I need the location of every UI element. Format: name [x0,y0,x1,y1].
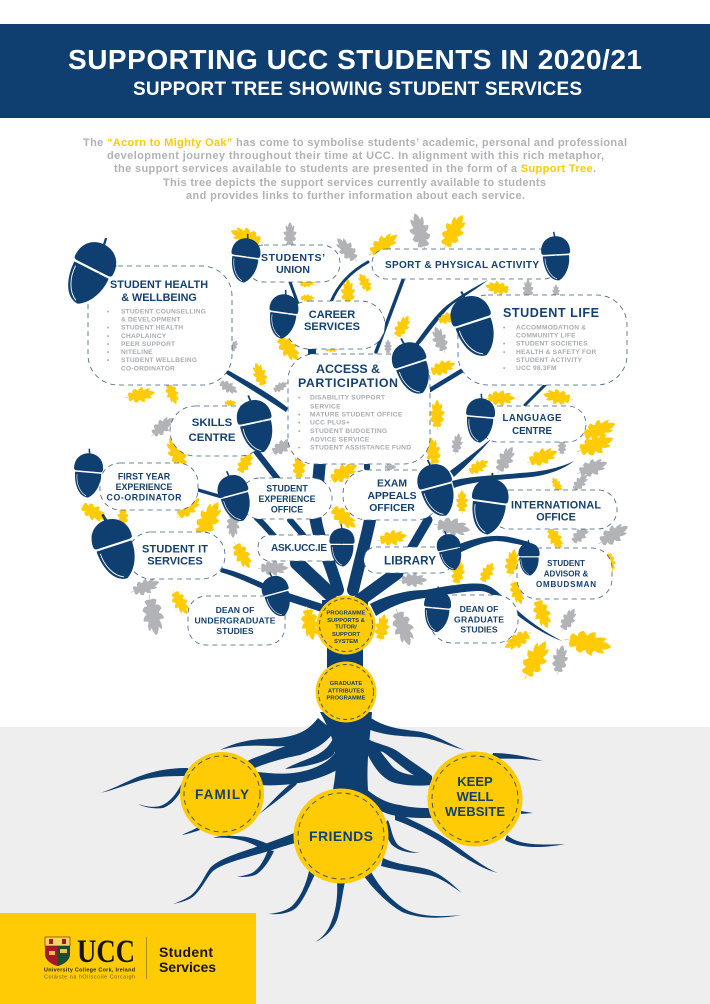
service list: STUDENT BUDGETING [310,428,387,435]
intro text block: This tree depicts the support services currently available to students [163,177,546,189]
circle: graduate attributes programme [316,662,376,722]
intro text block: the support services available to students are presented in the form of a Support Tree. [114,163,596,175]
node: dean of graduate studies: GRADUATE [454,614,504,624]
intro text block: The “Acorn to Mighty Oak” has come to symbolise students’ academic, personal and professional [83,137,627,149]
node: library [364,528,466,573]
icon: acorn [72,448,105,499]
node: student it services: SERVICES [147,556,203,568]
circle: graduate attributes programme: PROGRAMME [327,695,366,701]
node: student advisor and ombudsman: OMBUDSMAN [536,580,596,589]
service list: ACCOMMODATION & [516,324,586,332]
service list: STUDENT ASSISTANCE FUND [310,444,411,452]
circle: family: FAMILY [195,787,249,802]
node: library: LIBRARY [384,554,436,568]
node: exam appeals officer [343,455,461,521]
service list: • [503,324,506,332]
service list: • [503,341,506,348]
footer logo panel: Student [159,944,213,960]
icon: acorn [434,528,466,573]
node: international office [467,471,617,537]
service list: & DEVELOPMENT [121,316,181,324]
tree roots [100,712,565,942]
circle: friends [294,788,388,884]
circle: keep well website [428,752,522,846]
heading: & WELLBEING [121,292,197,304]
circle: keep well website: WELL [457,789,493,804]
node: career services [266,288,385,349]
service list: MATURE STUDENT OFFICE [310,412,403,418]
service list: • [107,349,110,356]
node: ask.ucc.ie [258,524,355,566]
circle: programme supports: PROGRAMME [327,611,366,617]
service list: SERVICE [310,404,341,410]
node: language centre: CENTRE [512,426,552,437]
heading [110,279,208,304]
service list: STUDENT ACTIVITY [516,357,583,364]
node: student advisor and ombudsman: ADVISOR & [544,570,588,578]
heading: STUDENT HEALTH [110,279,208,291]
circle: keep well website: WEBSITE [445,804,505,819]
node: sport and physical activity [372,231,572,281]
service list: PEER SUPPORT [121,341,175,348]
icon: acorn [213,467,256,525]
service list: STUDENT HEALTH [121,325,183,332]
service list [503,324,597,372]
node: first year experience co-ordinator: FIRST YEAR [118,472,171,482]
service list: • [503,349,506,356]
node: exam appeals officer: OFFICER [369,503,415,514]
node: dean of graduate studies: DEAN OF [460,604,498,614]
service list: • [298,444,301,452]
node: students' union: STUDENTS’ [261,252,325,264]
heading: ACCESS & [316,362,380,376]
circle: programme supports: SUPPORT [332,632,360,638]
node: career services: SERVICES [304,321,360,333]
service list: STUDENT SOCIETIES [516,341,588,348]
node: skills centre: CENTRE [188,432,236,444]
icon: ucc crest [45,937,70,966]
node: student experience office: STUDENT [266,484,308,494]
node: first year experience co-ordinator: EXPERIENCE [116,482,172,492]
icon: acorn [84,508,144,585]
icon: acorn [258,569,295,620]
service list: STUDENT WELLBEING [121,357,197,364]
node: student it services [84,508,225,585]
tree trunk and branches [103,262,574,670]
footer logo panel: Coláiste na hOllscoile Corcaigh [44,974,135,980]
node: dean of undergraduate studies [188,569,295,645]
service list: NITELINE [121,349,153,356]
circle: programme supports: SUPPORTS & [327,618,365,624]
node: skills centre [170,392,279,456]
node: student experience office: EXPERIENCE [258,494,316,504]
node: first year experience co-ordinator [72,448,198,510]
node: dean of undergraduate studies: UNDERGRADUATE [194,616,276,626]
icon: acorn [232,392,279,456]
node: student it services: STUDENT IT [142,544,208,556]
node: student life [443,285,627,385]
icon: acorn [228,232,263,284]
service list: • [107,308,110,316]
footer logo panel: UCC [77,934,135,970]
footer logo panel [0,913,256,1004]
node: first year experience co-ordinator: CO-ORDINATOR [106,492,182,502]
service list: • [107,333,110,340]
icon: acorn [329,524,355,566]
node: skills centre: SKILLS [192,417,233,429]
node: access and participation [288,333,437,464]
icon: acorn [412,455,461,521]
footer logo panel: Services [159,959,216,975]
service list: STUDENT COUNSELLING [121,308,206,316]
node: dean of graduate studies [422,585,518,643]
icon: acorn [464,393,497,444]
service list: • [298,394,301,402]
heading: PARTICIPATION [298,376,398,390]
service list [298,394,411,452]
node: dean of graduate studies: STUDIES [460,624,498,634]
header band [0,24,710,118]
service list: • [107,325,110,332]
footer logo panel: University College Cork, Ireland [44,968,135,974]
service list: UCC PLUS+ [310,420,350,427]
node: exam appeals officer: APPEALS [368,491,417,502]
service list: HEALTH & SAFETY FOR [516,349,597,356]
heading: STUDENT LIFE [503,306,599,320]
service list: COMMUNITY LIFE [516,332,576,340]
circle: programme supports: TUTOR/ [335,625,357,631]
service list: • [298,412,301,418]
intro text block [83,137,627,202]
circle: family [180,752,264,836]
icon: acorn [266,288,301,340]
icon: acorn [422,585,453,633]
intro text block: and provides links to further information about each service. [186,190,525,202]
node: language centre [464,393,586,444]
node: ask.ucc.ie: ASK.UCC.IE [271,543,327,554]
circle: friends: FRIENDS [309,828,373,844]
service list: UCC 98.3FM [516,365,557,372]
node: sport and physical activity: SPORT & PHYSICAL ACTIVITY [385,260,539,271]
node: student advisor and ombudsman [517,540,612,599]
circle: keep well website: KEEP [457,774,493,789]
service list: • [503,365,506,372]
icon: acorn [386,333,437,399]
node: international office: INTERNATIONAL [511,500,601,512]
node: student experience office [213,467,332,525]
node: student advisor and ombudsman: STUDENT [547,559,585,568]
service list [107,308,206,372]
oak leaves [76,210,632,684]
node: student experience office: OFFICE [271,504,303,514]
service list: • [298,428,301,435]
intro text block: development journey throughout their time at UCC. In alignment with this rich metaphor, [107,150,604,162]
node: dean of undergraduate studies: DEAN OF [216,605,254,615]
circle: programme supports [316,596,376,654]
ground panel [0,727,710,1004]
title: SUPPORTING UCC STUDENTS IN 2020/21 [68,44,642,75]
node: student health and wellbeing [56,229,232,385]
service list: ADVICE SERVICE [310,436,370,444]
node: exam appeals officer: EXAM [377,478,407,490]
heading [298,362,398,390]
node: international office: OFFICE [536,512,576,524]
node: students' union [228,232,340,284]
circle: graduate attributes programme: GRADUATE [330,681,362,687]
icon: acorn [56,229,126,312]
node: language centre: LANGUAGE [502,413,562,424]
service list: • [107,341,110,348]
circle: programme supports: SYSTEM [334,639,358,645]
circle: graduate attributes programme: ATTRIBUTES [328,688,364,694]
service list: CHAPLAINCY [121,333,167,340]
icon: acorn [540,231,572,281]
service list: • [298,420,301,427]
service list: CO-ORDINATOR [121,366,175,372]
service list: • [107,357,110,364]
node: dean of undergraduate studies: STUDIES [216,626,254,636]
icon: acorn [467,471,512,537]
icon: acorn [443,285,503,362]
node: career services: CAREER [309,309,355,321]
service list: DISABILITY SUPPORT [310,394,386,402]
node: students' union: UNION [276,264,310,276]
subtitle: SUPPORT TREE SHOWING STUDENT SERVICES [133,79,582,100]
icon: acorn [518,540,540,576]
